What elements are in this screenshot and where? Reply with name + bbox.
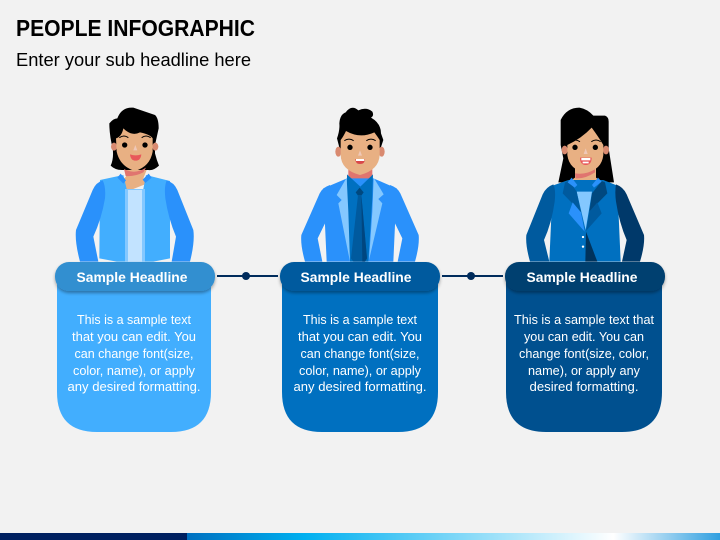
card 3 text: desired formatting. [530,379,638,394]
person: woman in dark blue jacket [526,108,644,262]
footer bar [0,533,720,540]
card 3 text: change font(size, color, [519,346,649,361]
card 2 header [280,262,440,291]
panel: card 1 [55,262,215,432]
person: man in blue suit [301,108,419,262]
card 1 text: that you can edit. You [72,329,196,344]
card 2 text: that you can edit. You [298,329,422,344]
card 1 text [68,312,200,394]
card 2 text: can change font(size, [300,346,420,361]
card 2 body [282,276,438,432]
card 1 body [57,276,211,432]
connector 1 [217,272,278,280]
card 1 text: any desired formatting. [68,379,200,394]
card 2 text: any desired formatting. [294,379,426,394]
card 2 text: color, name), or apply [299,363,421,378]
card 1 text: This is a sample text [77,312,191,327]
card 1 text: can change font(size, [74,346,194,361]
panel: card 2 [280,262,440,432]
card 2 header: Sample Headline [300,269,412,285]
title: PEOPLE INFOGRAPHIC [16,15,255,41]
subtitle: Enter your sub headline here [16,50,251,70]
card 3 text [514,312,654,394]
card 3 text: This is a sample text that [514,312,654,327]
card 3 text: you can edit. You can [524,329,644,344]
card 3 text: name), or apply any [528,363,640,378]
card 2 text: This is a sample text [303,312,417,327]
connector 2 [442,272,503,280]
card 2 text [294,312,426,394]
card 1 header [55,262,215,291]
person: woman in light blue jacket [76,108,194,262]
card 3 header: Sample Headline [526,269,638,285]
card 1 text: color, name), or apply [73,363,195,378]
card 1 header: Sample Headline [76,269,188,285]
card 3 header [505,262,665,291]
panel: card 3 [505,262,665,432]
card 3 body [506,276,662,432]
